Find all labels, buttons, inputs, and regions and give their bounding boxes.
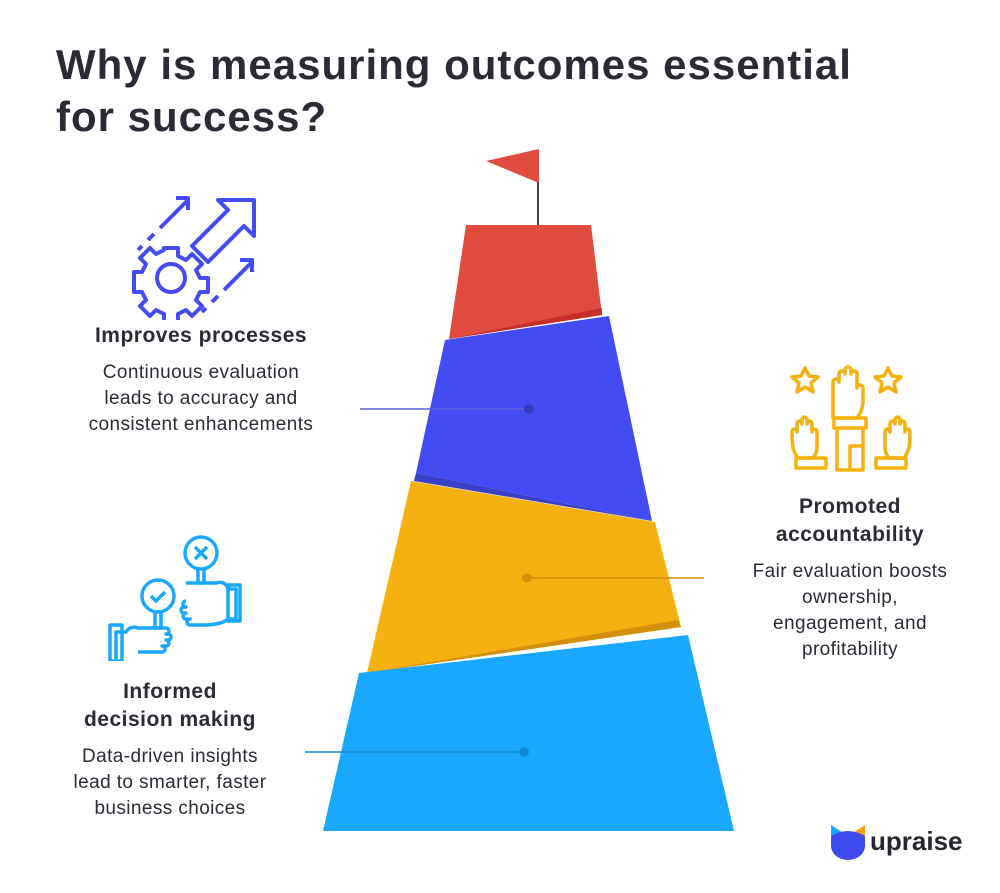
icon: gear with arrows bbox=[132, 196, 256, 320]
text: Improves processes: Improves processes bbox=[95, 324, 307, 347]
text: Promoted accountability: Promoted bbox=[799, 495, 901, 518]
text: Informed decision making: Data-driven insights bbox=[82, 746, 258, 767]
text: Promoted accountability: engagement, and bbox=[773, 613, 927, 634]
text: Informed decision making: Informed bbox=[123, 680, 217, 703]
text: Promoted accountability: accountability bbox=[776, 523, 924, 546]
connector: cyan bbox=[305, 748, 529, 756]
layer: yellow bbox=[367, 481, 681, 673]
text: Promoted accountability: ownership, bbox=[802, 587, 898, 608]
text: Informed decision making: decision making bbox=[84, 708, 256, 731]
connector: yellow bbox=[522, 574, 704, 582]
text: Informed decision making bbox=[74, 680, 266, 819]
text: Informed decision making: lead to smarter, faster bbox=[74, 772, 266, 793]
title: Why is measuring outcomes essential bbox=[56, 41, 852, 88]
layer: cyan bbox=[323, 635, 734, 831]
layer: red top bbox=[449, 225, 602, 339]
text: Improves processes: consistent enhancements bbox=[89, 414, 313, 435]
logo: upraise: upraise bbox=[870, 826, 962, 856]
text: Promoted accountability: Fair evaluation boosts bbox=[753, 561, 947, 582]
text: Improves processes: Continuous evaluation bbox=[103, 362, 299, 383]
text: Promoted accountability bbox=[753, 495, 947, 660]
icon: raised hands with stars bbox=[790, 365, 912, 472]
text: Improves processes: leads to accuracy and bbox=[104, 388, 298, 409]
text: Improves processes bbox=[89, 324, 313, 435]
connector: blue bbox=[360, 404, 534, 414]
icon: hands with check and cross signs bbox=[108, 535, 242, 661]
logo: upraise bbox=[831, 825, 962, 860]
text: Informed decision making: business choices bbox=[94, 798, 246, 819]
text: Promoted accountability: profitability bbox=[802, 639, 898, 660]
title: for success? bbox=[56, 93, 327, 140]
title bbox=[56, 41, 852, 140]
layer: blue bbox=[414, 316, 652, 521]
flag bbox=[486, 149, 539, 227]
